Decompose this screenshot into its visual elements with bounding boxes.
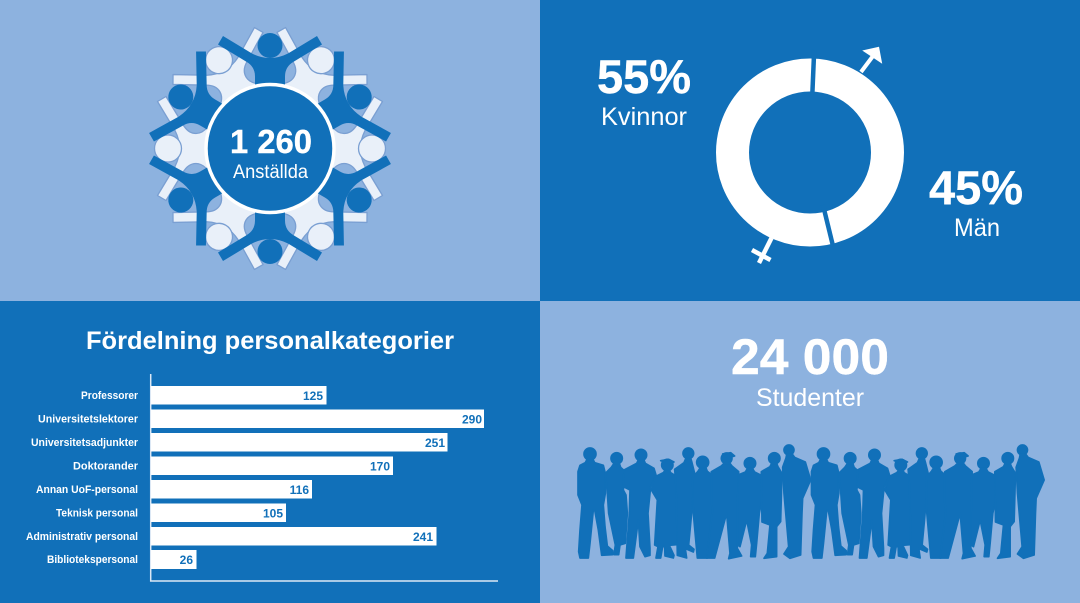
icon: male arrow [861, 47, 882, 72]
bar values: 125 [303, 389, 323, 403]
category labels: Universitetslektorer [38, 414, 139, 426]
category labels: Administrativ personal [26, 531, 138, 543]
panel: gender background [540, 0, 1080, 301]
employee count: 1 260 [230, 123, 312, 160]
category labels: Teknisk personal [56, 508, 138, 520]
chart title: Fördelning personalkategorier [86, 327, 454, 355]
bar values: 105 [263, 506, 283, 520]
category labels: Universitetsadjunkter [31, 437, 139, 449]
bars [151, 386, 484, 569]
category labels: Bibliotekspersonal [47, 554, 138, 566]
category labels: Doktorander [73, 460, 139, 472]
bar values: 241 [413, 530, 433, 544]
panel: staff categories background [0, 301, 540, 603]
men percentage: 45% [929, 161, 1023, 214]
bar values: 251 [425, 436, 445, 450]
axes [151, 374, 498, 581]
bar chart: staff categories [26, 374, 498, 581]
panel: employees background [0, 0, 540, 301]
icon: female cross [752, 238, 772, 263]
illustration: crowd silhouettes [578, 445, 1044, 559]
student label: Studenter [756, 384, 864, 412]
panel: students background [540, 301, 1080, 603]
donut chart: gender split [732, 50, 888, 246]
employee label: Anställda [233, 162, 308, 183]
bar values: 170 [370, 460, 390, 474]
women label: Kvinnor [601, 103, 687, 131]
men label: Män [954, 214, 1000, 242]
category labels [26, 390, 139, 566]
women percentage: 55% [597, 50, 691, 103]
student count: 24 000 [731, 329, 889, 385]
bar values: 116 [290, 483, 309, 497]
bar values: 290 [462, 412, 482, 426]
category labels: Annan UoF-personal [36, 484, 138, 496]
bar values [180, 389, 482, 567]
category labels: Professorer [81, 390, 139, 402]
icon: wreath of people around employee count [144, 22, 396, 275]
bar values: 26 [180, 553, 193, 567]
